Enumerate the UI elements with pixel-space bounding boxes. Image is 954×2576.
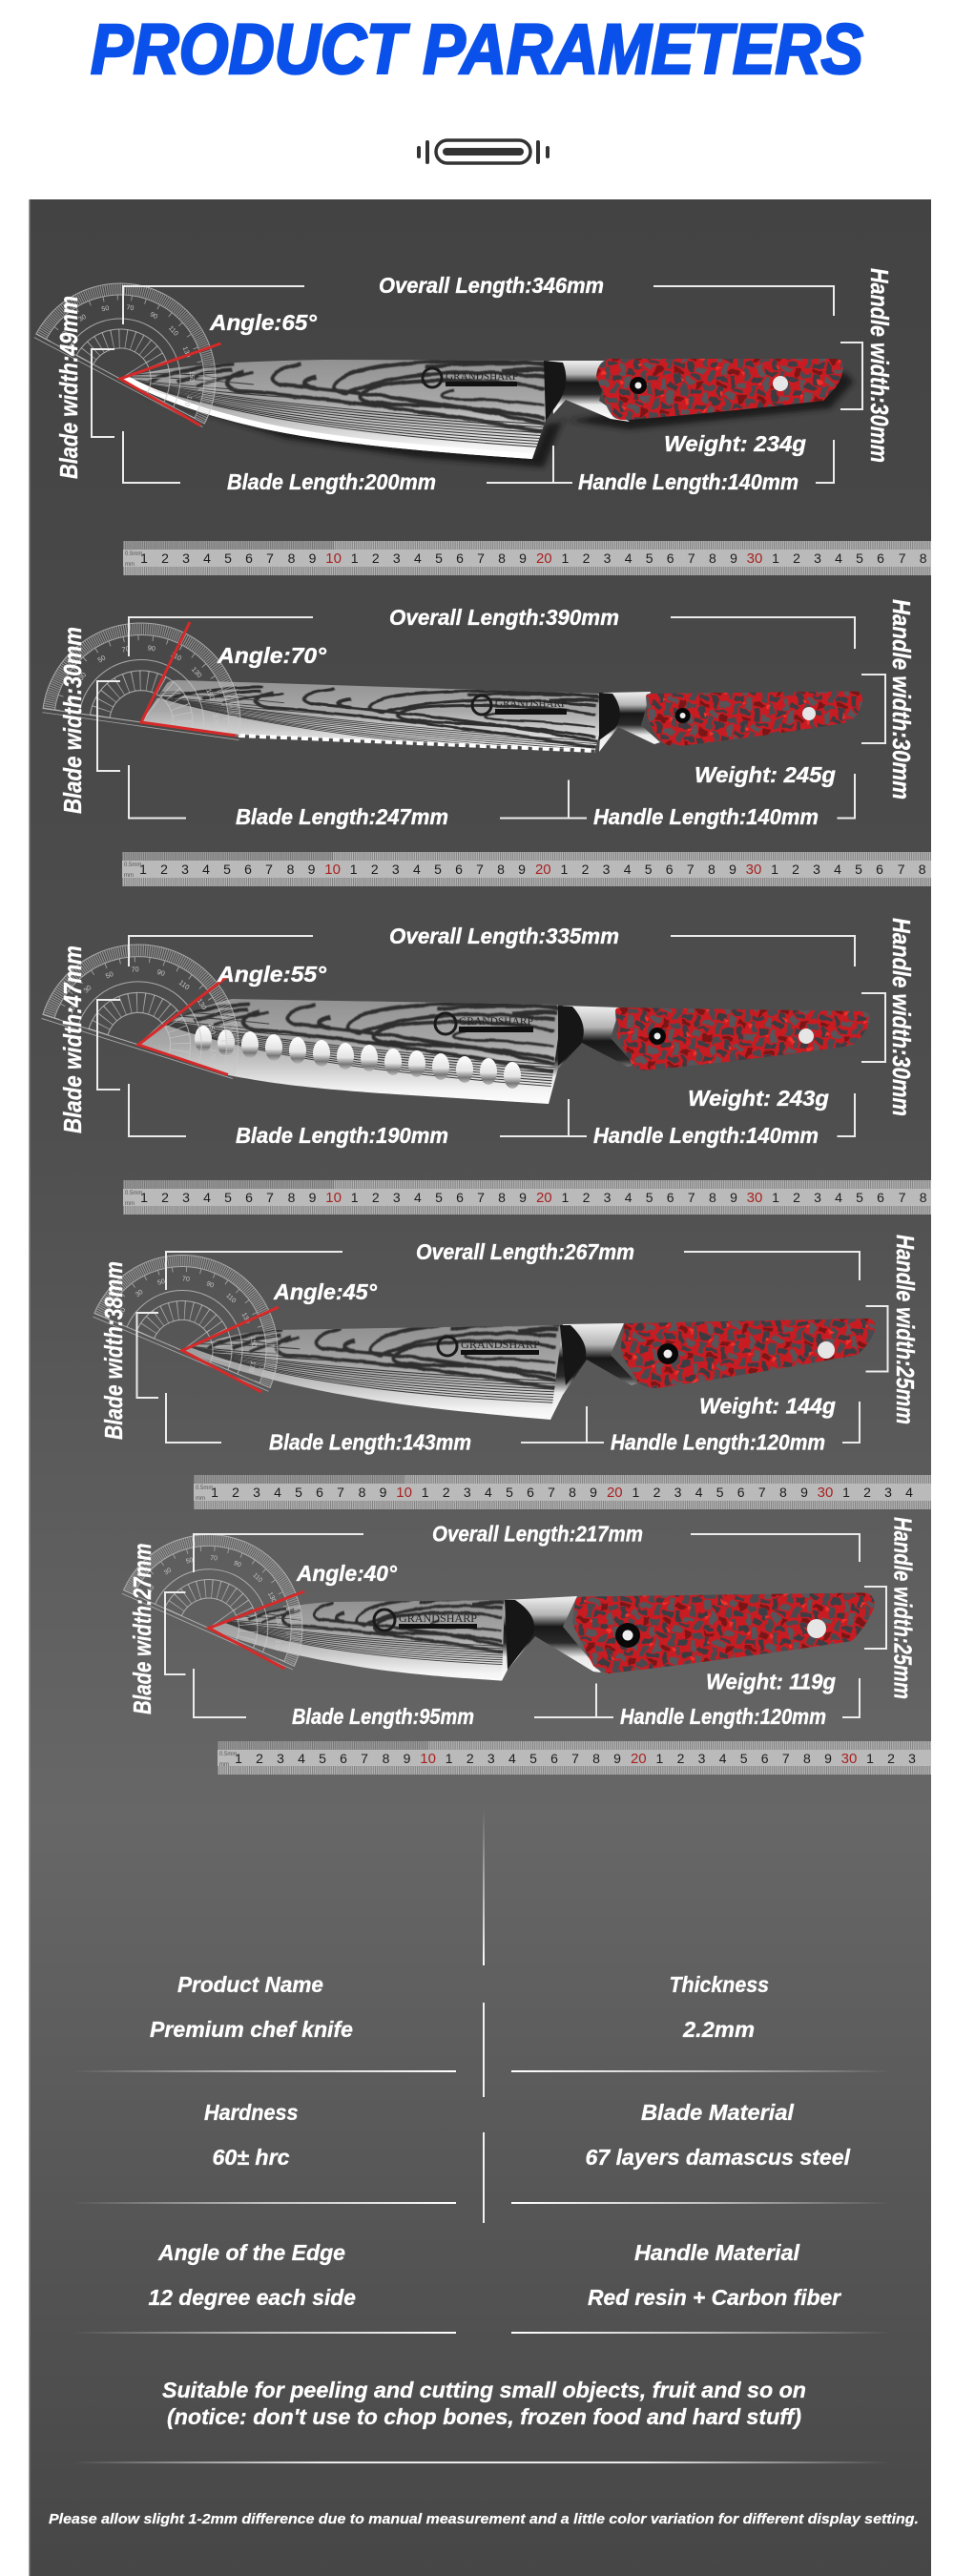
ruler 1: 123456789 [562, 551, 737, 566]
ruler 1: 123456789 [140, 551, 317, 566]
knife 1 handle width: Handle width:30mm [865, 268, 894, 463]
knife 4 protractor [93, 1225, 307, 1391]
knife 5 handle width: Handle width:25mm [889, 1517, 918, 1699]
ruler 3: 10 [325, 1190, 342, 1206]
knife 2 overall length: Overall Length:390mm [389, 605, 619, 630]
ruler 4: 20 [607, 1485, 623, 1501]
knife 4 rivets [657, 1341, 835, 1364]
ruler 2 [122, 852, 931, 886]
ruler 4: mm [196, 1496, 205, 1502]
ruler 5: 123456789 [446, 1751, 621, 1766]
knife 3 tang and bolster [549, 1006, 634, 1104]
spec: thickness: 2.2mm [682, 2017, 755, 2042]
knife 4 logo: GRANDSHARP [461, 1338, 540, 1351]
ruler 2: 10 [324, 862, 341, 878]
ruler 4: 123456789 [422, 1485, 597, 1500]
spec: product name [150, 1972, 353, 2042]
ruler 2: mm [124, 873, 134, 879]
ruler 4 [194, 1475, 931, 1509]
usage note: (notice: don't use to chop bones, frozen food and hard stuff) [167, 2404, 801, 2429]
knife 2 handle length: Handle Length:140mm [593, 804, 819, 829]
knife 3 blade width: Blade width:47mm [58, 945, 87, 1133]
title: PRODUCT PARAMETERS [91, 10, 863, 89]
ruler 4: 0.5mm [196, 1485, 213, 1491]
ruler 3: 20 [536, 1190, 552, 1206]
knife 5 bracket lines [165, 1534, 886, 1717]
spec: angle of the edge [149, 2240, 356, 2310]
ruler 5: 30 [841, 1751, 857, 1767]
ruler 1: 10 [325, 551, 342, 567]
ruler 2: 20 [535, 862, 551, 878]
knife 2 rivets [675, 707, 816, 723]
knife 4 bracket lines [137, 1252, 887, 1443]
ruler 4: 123456789 [211, 1485, 387, 1500]
knife 5 blade length: Blade Length:95mm [292, 1704, 474, 1729]
knife 3 angle: Angle:55° [217, 962, 327, 987]
ruler 3: 0.5mm [125, 1191, 142, 1196]
knife 1 weight: Weight: 234g [664, 431, 806, 456]
knife 3 handle width: Handle width:30mm [887, 918, 916, 1116]
ruler 4: 30 [818, 1485, 833, 1501]
knife 1 angle: Angle:65° [209, 310, 318, 335]
ruler 1: 30 [747, 551, 762, 567]
knife 1 logo [423, 368, 518, 387]
knife 1 handle length: Handle Length:140mm [578, 469, 798, 494]
ruler 5: mm [219, 1762, 229, 1768]
spec: hardness: Hardness [204, 2100, 298, 2125]
knife 4 blade length: Blade Length:143mm [269, 1429, 471, 1454]
ruler 3: 30 [747, 1190, 762, 1206]
knife 2 protractor [42, 611, 253, 740]
knife 3 logo: GRANDSHARP [459, 1014, 533, 1028]
spec: blade material: Blade Material [641, 2100, 795, 2125]
knife 5 tang and bolster [502, 1596, 601, 1681]
usage note [162, 2378, 806, 2429]
knife 5 blade width: Blade width:27mm [128, 1544, 156, 1714]
ruler 1: mm [125, 562, 135, 568]
ruler 3: 123456789 [562, 1190, 737, 1205]
knife 5 protractor [122, 1505, 332, 1670]
knife 3 weight: Weight: 243g [688, 1086, 829, 1111]
knife 1 logo: GRANDSHARP [446, 369, 518, 383]
knife 4 overall length: Overall Length:267mm [416, 1239, 634, 1264]
spec: product name: Premium chef knife [150, 2017, 353, 2042]
ruler 5: 0.5mm [219, 1752, 237, 1757]
knife 1 overall length: Overall Length:346mm [379, 273, 604, 298]
ruler 2: 123456789 [561, 862, 736, 877]
ruler 1: 0.5mm [125, 551, 142, 557]
knife 5 handle length: Handle Length:120mm [620, 1704, 826, 1729]
knife 1 angle lines [120, 343, 221, 426]
ruler 5: 10 [420, 1751, 436, 1767]
knife 2 handle [646, 691, 862, 746]
knife 3 protractor [42, 919, 264, 1079]
knife 2 weight: Weight: 245g [695, 762, 836, 787]
usage note: Suitable for peeling and cutting small objects, fruit and so on [162, 2378, 806, 2402]
knife 5 angle: Angle:40° [296, 1561, 398, 1586]
knife 4 angle lines [182, 1307, 279, 1392]
knife 2 angle: Angle:70° [217, 643, 327, 668]
ruler 4: 10 [396, 1485, 412, 1501]
ruler 2: 123456789 [139, 862, 316, 877]
ruler 1: 12345678 [772, 551, 927, 566]
ruler 1 [123, 541, 931, 575]
knife 3 bracket lines [97, 936, 885, 1136]
knife 4 blade [185, 1325, 561, 1420]
panel: knife 1 measurements [34, 250, 894, 494]
knife 1 blade width: Blade width:49mm [54, 296, 83, 479]
note divider [73, 2462, 891, 2463]
ruler 1: 123456789 [351, 551, 527, 566]
row dividers [73, 2070, 891, 2334]
ruler 2: 12345678 [771, 862, 926, 877]
knife 1 rivets [630, 376, 788, 394]
spec: thickness: Thickness [670, 1972, 769, 1997]
ruler 3: 123456789 [140, 1190, 317, 1205]
ruler 5: 20 [631, 1751, 647, 1767]
ruler 2: 123456789 [350, 862, 526, 877]
knife 4 angle: Angle:45° [273, 1279, 378, 1304]
knife 2 tang and bolster [599, 692, 660, 752]
spec: handle material: Red resin + Carbon fiber [588, 2285, 841, 2310]
knife 2 angle lines [141, 622, 237, 736]
ruler 2: 0.5mm [124, 862, 141, 868]
knife 1 blade [124, 360, 548, 459]
knife 3 handle [615, 1008, 870, 1070]
centre divider [483, 1809, 485, 2223]
spec: product name: Product Name [177, 1972, 323, 1997]
spec: angle of the edge: Angle of the Edge [157, 2240, 345, 2265]
knife 1 protractor [34, 250, 249, 426]
knife 1 bracket lines [92, 286, 862, 483]
ruler 2: 30 [746, 862, 761, 878]
knife 3 handle length: Handle Length:140mm [593, 1123, 819, 1148]
panel: knife 5 measurements [122, 1505, 918, 1729]
knife 5 overall length: Overall Length:217mm [432, 1521, 643, 1546]
panel: specification table [49, 1809, 919, 2527]
knife 4 logo [438, 1337, 540, 1356]
spec: angle of the edge: 12 degree each side [149, 2285, 356, 2310]
ruler 3: 12345678 [772, 1190, 927, 1205]
knife 2 logo [472, 696, 567, 715]
ruler 5: 123456789 [235, 1751, 411, 1766]
knife 3 dimples [195, 1026, 521, 1089]
knife 4 handle width: Handle width:25mm [891, 1235, 920, 1424]
knife 5 handle [572, 1592, 875, 1673]
spec: blade material [586, 2100, 851, 2170]
panel: knife 3 measurements [42, 918, 916, 1148]
ruler 5: 123 [866, 1751, 916, 1766]
knife 2 bracket lines [97, 617, 885, 819]
ruler 1: 20 [536, 551, 552, 567]
spec: handle material: Handle Material [634, 2240, 800, 2265]
knife 2 blade width: Blade width:30mm [58, 627, 87, 814]
knife 5 weight: Weight: 119g [706, 1670, 836, 1694]
knife 4 tang and bolster [550, 1323, 637, 1420]
knife 5 rivets [615, 1619, 826, 1648]
knife 3 logo [435, 1013, 533, 1034]
knife 4 handle [620, 1319, 876, 1388]
knife 2 serrated edge [238, 736, 595, 751]
knife 1 shadow [134, 372, 854, 467]
knife 1 blade length: Blade Length:200mm [227, 469, 436, 494]
spec: blade material: 67 layers damascus steel [586, 2145, 851, 2170]
knife 2 blade [143, 679, 599, 750]
knife 3 rivets [649, 1028, 814, 1045]
ruler 5 [218, 1741, 931, 1775]
icon: capsule divider [417, 140, 550, 164]
knife 5 blade [212, 1600, 508, 1681]
spec: thickness [670, 1972, 769, 2042]
knife 3 blade [141, 999, 558, 1104]
knife 2 handle width: Handle width:30mm [887, 599, 916, 800]
knife 1 handle [596, 359, 843, 420]
knife 5 angle lines [209, 1591, 304, 1669]
knife 2 logo: GRANDSHARP [495, 696, 567, 710]
spec: handle material [588, 2240, 841, 2310]
knife 4 blade width: Blade width:38mm [99, 1261, 128, 1440]
ruler 3: 123456789 [351, 1190, 527, 1205]
knife 2 blade length: Blade Length:247mm [236, 804, 448, 829]
knife 4 handle length: Handle Length:120mm [611, 1429, 825, 1454]
panel: knife 2 measurements [42, 599, 916, 829]
ruler 3 [123, 1180, 931, 1215]
panel: knife 4 measurements [93, 1225, 920, 1454]
knife 3 overall length: Overall Length:335mm [389, 924, 619, 948]
spec: hardness [204, 2100, 298, 2170]
disclaimer: Please allow slight 1-2mm difference due to manual measurement and a little color variation for different display setting. [49, 2511, 919, 2527]
knife 3 blade length: Blade Length:190mm [236, 1123, 448, 1148]
ruler 3: mm [125, 1201, 135, 1207]
knife 1 tang and bolster [544, 361, 630, 422]
knife 5 logo [374, 1610, 477, 1631]
ruler 5: 123456789 [656, 1751, 832, 1766]
knife 4 weight: Weight: 144g [699, 1393, 836, 1418]
knife 5 logo: GRANDSHARP [399, 1611, 477, 1625]
spec: hardness: 60± hrc [212, 2145, 290, 2170]
knife 3 angle lines [138, 977, 228, 1074]
ruler 4: 1234 [842, 1485, 913, 1500]
ruler 4: 123456789 [633, 1485, 808, 1500]
